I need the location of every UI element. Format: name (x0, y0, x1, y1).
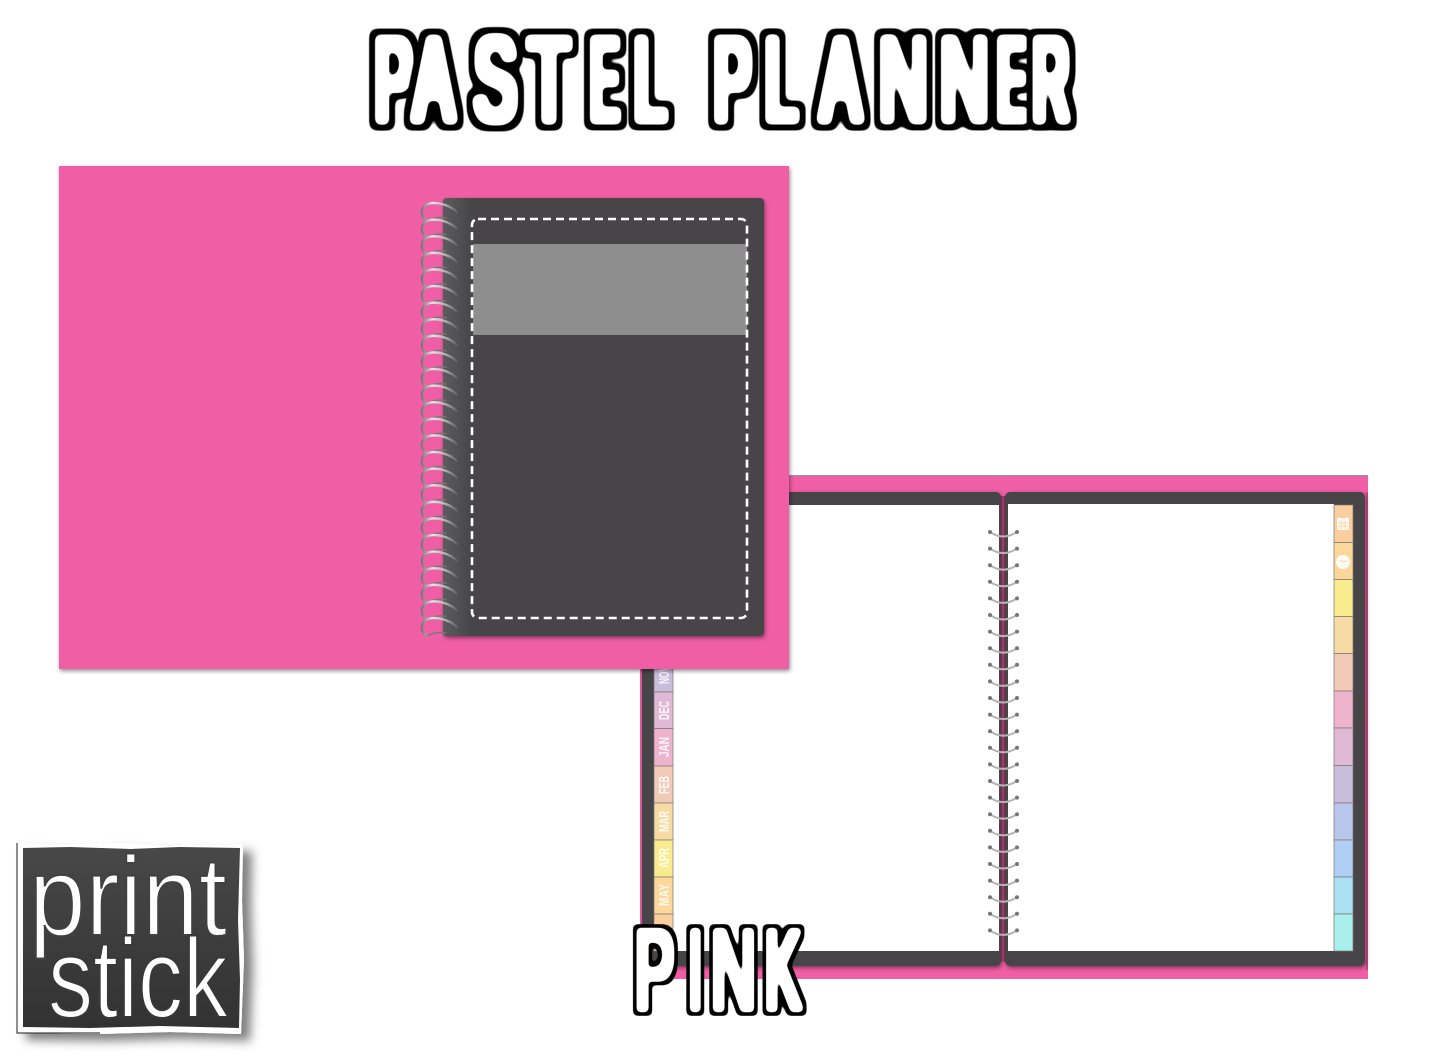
title: S (474, 14, 517, 146)
month tab labels: MAR (656, 811, 673, 832)
left month tabs (654, 655, 673, 951)
cover binding strip (443, 198, 472, 636)
logo rough white frame (17, 843, 244, 1034)
icon: clock (1336, 555, 1350, 569)
month tab labels: APR (656, 848, 673, 868)
cover dark board (443, 198, 764, 636)
variant label: PINK (635, 907, 800, 1034)
title: L (634, 13, 666, 145)
left page frame (642, 492, 1001, 966)
planner pink backing (640, 475, 1368, 979)
right tabs (1334, 505, 1353, 951)
logo word stick: stick (48, 916, 229, 1041)
title: P (375, 14, 412, 146)
month tab labels: JAN (656, 737, 673, 757)
logo word print: print (29, 834, 227, 959)
variant label: PINK: K (765, 907, 800, 1033)
panel: planner cover (59, 166, 789, 669)
spine gap (1001, 496, 1005, 962)
title: L (765, 13, 797, 145)
label band (473, 244, 747, 335)
center spiral binding (988, 530, 1019, 935)
variant label: PINK: P (635, 907, 674, 1034)
title (375, 13, 1069, 146)
panel: open planner spread (640, 475, 1368, 979)
title: A (414, 14, 454, 145)
cover spiral binding (422, 203, 457, 636)
month tab labels: MAY (656, 884, 673, 906)
title: N (879, 14, 928, 146)
month tab labels: FEB (656, 776, 673, 794)
title: P (714, 14, 751, 146)
title: E (998, 13, 1026, 145)
left page (673, 505, 999, 951)
title: R (1033, 14, 1069, 146)
title: N (940, 14, 989, 146)
stitched dashed border (472, 219, 747, 618)
logo: print stick (17, 834, 244, 1041)
variant label: PINK: I (689, 908, 702, 1034)
logo dark plate (23, 847, 240, 1028)
title: A (821, 14, 861, 145)
month tab labels: DEC (656, 701, 673, 720)
logo left edge line (17, 843, 100, 1033)
right page frame (1005, 492, 1365, 966)
title: T (528, 15, 570, 146)
cover pink background (59, 166, 789, 669)
right page (1008, 504, 1334, 951)
month tab labels: NOV (656, 666, 673, 684)
month tab labels (656, 666, 673, 906)
title: E (591, 13, 619, 145)
icon: calendar (1337, 517, 1349, 530)
variant label: PINK: N (711, 907, 756, 1034)
